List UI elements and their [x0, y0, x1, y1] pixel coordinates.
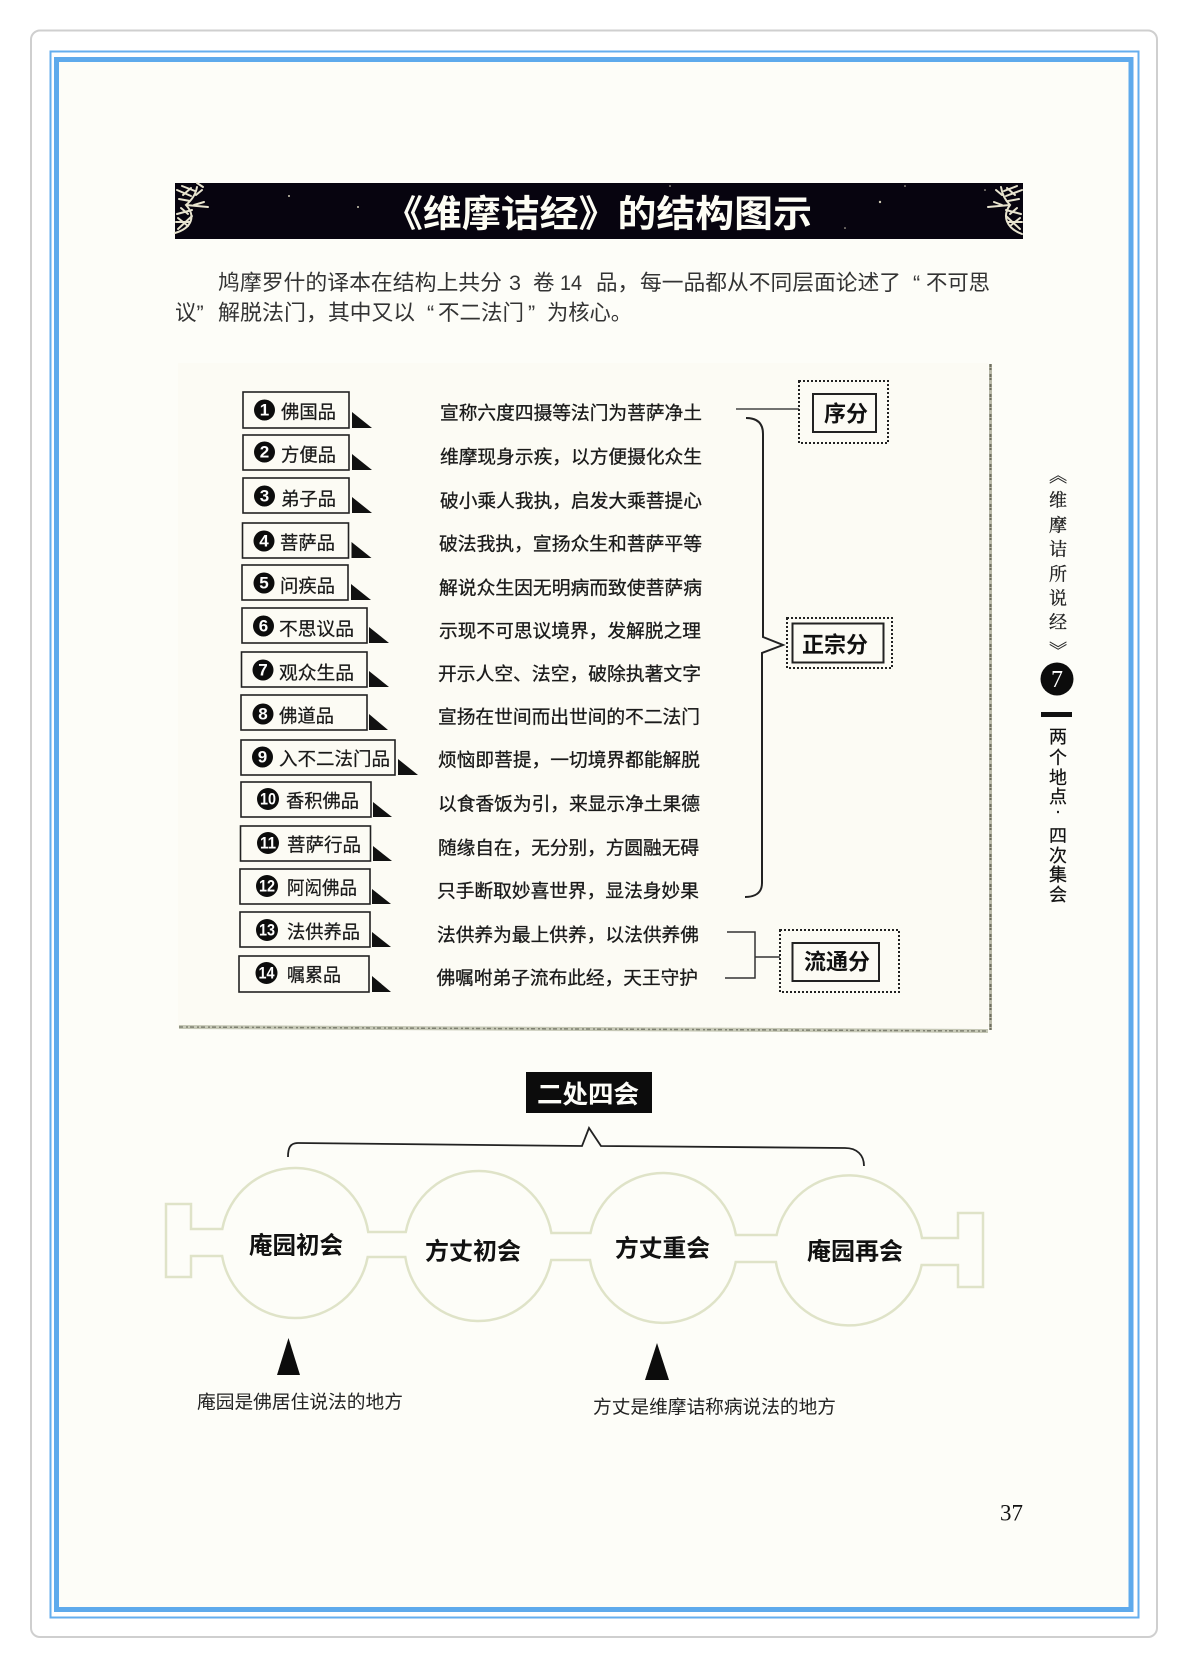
side bar — [1041, 712, 1072, 717]
chapter descriptions: 维摩现身示疾，以方便摄化众生 — [440, 446, 702, 468]
chapter 10: 10 — [260, 790, 276, 808]
intro paragraph: 不可思 — [926, 271, 990, 295]
chapter 14 — [239, 956, 391, 992]
chapter 2 — [243, 435, 372, 470]
intro paragraph: 议” — [175, 301, 204, 325]
chapter 10 — [241, 782, 392, 817]
intro paragraph: “ — [427, 301, 434, 325]
chapter 7: 7 — [258, 660, 268, 680]
category: circulation section: 流通分 — [804, 950, 870, 974]
chapter number circle — [1040, 662, 1074, 696]
chapter descriptions: 解说众生因无明病而致使菩萨病 — [439, 578, 702, 598]
chapter 13 — [240, 912, 391, 947]
banner title text: 《维摩诘经》的结构图示 — [384, 194, 812, 234]
chapter 1: 佛国品 — [281, 402, 336, 422]
side book title: 所 — [1049, 560, 1067, 586]
intro paragraph: 鸠摩罗什的译本在结构上共分 — [218, 271, 502, 295]
chapter 13: 法供养品 — [287, 922, 360, 942]
chapter descriptions — [436, 402, 702, 988]
chapter 5 — [242, 565, 371, 600]
category: preface: 序分 — [824, 402, 868, 426]
assembly 3: 方丈重会 — [615, 1234, 710, 1262]
assembly 4: 庵园再会 — [807, 1238, 903, 1266]
page number: 37 — [1000, 1500, 1023, 1526]
chapter 14: 嘱累品 — [287, 964, 341, 986]
chapter 12: 12 — [259, 876, 275, 896]
chapter 11: 菩萨行品 — [287, 834, 361, 856]
brace: main section — [745, 418, 783, 897]
chapter descriptions: 随缘自在，无分别，方圆融无碍 — [438, 838, 699, 858]
marker: garden — [197, 1338, 403, 1412]
side section title: 四 — [1049, 826, 1067, 846]
chapter 12: 阿闳佛品 — [287, 878, 357, 898]
side section title: 地 — [1049, 768, 1067, 788]
chapter 3 — [243, 478, 372, 513]
chapter descriptions: 破小乘人我执，启发大乘菩提心 — [440, 490, 702, 512]
side book title: 诘 — [1049, 536, 1067, 562]
title banner — [175, 183, 1023, 239]
chapter 1: 1 — [260, 400, 269, 420]
chapter 7: 观众生品 — [279, 662, 354, 684]
banner specks — [288, 185, 986, 229]
chapter 6: 不思议品 — [279, 618, 354, 640]
chapter 5: 问疾品 — [280, 576, 335, 596]
side section title: 两 — [1049, 727, 1067, 747]
side book title: 说 — [1049, 584, 1067, 610]
chapter 6 — [242, 608, 389, 643]
chapter 3: 3 — [260, 486, 269, 506]
side book title: 《 — [1045, 466, 1071, 484]
chain outline — [166, 1168, 983, 1325]
side book title: 》 — [1045, 641, 1071, 659]
chapter number circle: 7 — [1051, 667, 1063, 693]
chapter descriptions: 开示人空、法空，破除执著文字 — [438, 664, 701, 684]
intro paragraph: 卷 — [533, 271, 555, 295]
category: circulation section — [780, 930, 899, 992]
intro paragraph: 品， — [596, 271, 639, 295]
marker: abbot room — [593, 1343, 836, 1418]
chapter descriptions: 只手断取妙喜世界，显法身妙果 — [437, 880, 699, 902]
side tab — [1040, 466, 1074, 905]
top brace — [288, 1128, 864, 1166]
connector to preface — [736, 408, 799, 410]
heading: two places four assemblies — [526, 1072, 652, 1113]
chapter descriptions: 法供养为最上供养，以法供养佛 — [437, 924, 699, 946]
chapter descriptions: 示现不可思议境界，发解脱之理 — [439, 620, 701, 642]
chapter 8 — [241, 695, 388, 730]
intro paragraph: 3 — [509, 271, 521, 295]
chapter descriptions: 以食香饭为引，来显示净土果德 — [438, 794, 700, 814]
chapter 4: 4 — [259, 532, 269, 550]
chapter descriptions: 烦恼即菩提，一切境界都能解脱 — [438, 750, 700, 770]
side book title: 经 — [1049, 608, 1067, 634]
category: main section: 正宗分 — [802, 632, 868, 658]
chapter 2: 方便品 — [281, 444, 336, 466]
category: main section — [787, 618, 892, 668]
side section title — [1049, 727, 1067, 905]
side book title: 维 — [1049, 486, 1067, 512]
side section title: 会 — [1049, 885, 1067, 905]
intro paragraph: 每一品都从不同层面论述了 — [640, 271, 901, 295]
side section title: 集 — [1049, 865, 1067, 885]
panel: structure of the sutra — [178, 363, 990, 1031]
chapter 9 — [241, 740, 418, 775]
chapter 6: 6 — [259, 616, 268, 636]
chapter 9: 入不二法门品 — [279, 748, 390, 770]
chapter 5: 5 — [259, 574, 269, 592]
intro paragraph: 不二法门 — [438, 301, 524, 325]
chapter 8: 佛道品 — [279, 706, 334, 726]
chain of four assemblies — [166, 1168, 983, 1325]
heading: two places four assemblies: 二处四会 — [537, 1081, 639, 1109]
side book title: 摩 — [1049, 512, 1067, 538]
side section title: 点 — [1049, 787, 1067, 807]
chapter 9: 9 — [258, 748, 267, 766]
assembly 2: 方丈初会 — [425, 1238, 521, 1266]
side section title: · — [1055, 801, 1061, 821]
chapter 12 — [240, 869, 391, 904]
chapter 14: 14 — [258, 964, 275, 982]
chapter 11 — [240, 826, 392, 861]
chapter descriptions: 佛嘱咐弟子流布此经，天王守护 — [436, 968, 698, 988]
intro paragraph — [175, 271, 990, 325]
marker: garden: 庵园是佛居住说法的地方 — [197, 1392, 403, 1412]
side section title: 个 — [1049, 748, 1067, 768]
chapter descriptions: 宣称六度四摄等法门为菩萨净土 — [440, 402, 702, 424]
intro paragraph: 其中又以 — [328, 301, 415, 325]
bracket: circulation section — [725, 932, 780, 978]
intro paragraph: 解脱法门， — [218, 301, 328, 325]
category: preface — [799, 381, 888, 443]
chapter 11: 11 — [260, 834, 276, 852]
chapter 4: 菩萨品 — [280, 532, 335, 554]
banner ornament right — [988, 186, 1022, 234]
chapter descriptions: 宣扬在世间而出世间的不二法门 — [438, 706, 700, 728]
intro paragraph: 为核心。 — [547, 301, 632, 325]
chapter 4 — [242, 523, 372, 558]
chapter 2: 2 — [260, 442, 269, 462]
side book title — [1045, 466, 1071, 659]
chapter 8: 8 — [258, 704, 268, 724]
intro paragraph: “ — [913, 271, 920, 295]
chapter 10: 香积佛品 — [286, 790, 359, 812]
assembly 1: 庵园初会 — [249, 1232, 343, 1260]
chapter 7 — [242, 652, 389, 687]
chapter descriptions: 破法我执，宣扬众生和菩萨平等 — [439, 534, 702, 554]
intro paragraph: ” — [528, 301, 535, 325]
intro paragraph: 14 — [560, 271, 582, 295]
chapter 1 — [243, 392, 372, 428]
chapter 13: 13 — [259, 920, 275, 940]
marker: abbot room: 方丈是维摩诘称病说法的地方 — [593, 1396, 836, 1418]
side section title: 次 — [1049, 846, 1067, 866]
banner ornament left — [175, 183, 208, 233]
chapter 3: 弟子品 — [281, 488, 336, 510]
